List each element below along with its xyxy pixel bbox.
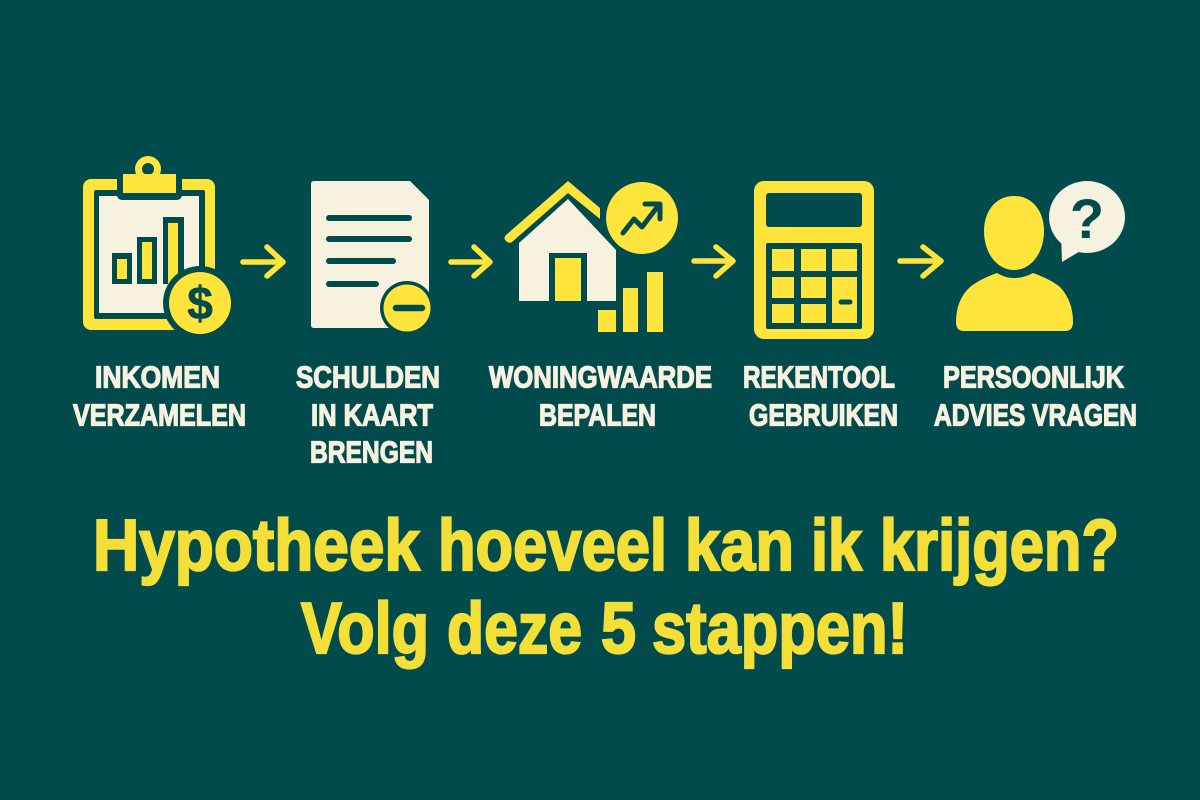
label: woningwaarde bepalen: [489, 360, 712, 432]
label: persoonlijk advies vragen: ADVIES VRAGEN: [934, 398, 1137, 432]
label: inkomen verzamelen: VERZAMELEN: [73, 398, 246, 432]
step 3: house icon with rising-value badge and bars: [504, 178, 682, 332]
label: rekentool gebruiken: [743, 360, 898, 432]
step 5: person icon with question bubble: ?: [1070, 187, 1104, 250]
label: schulden in kaart brengen: [296, 360, 440, 470]
title: Volg: [301, 589, 429, 669]
label: schulden in kaart brengen: SCHULDEN: [296, 360, 440, 394]
label: inkomen verzamelen: INKOMEN: [95, 360, 220, 394]
title: deze: [447, 589, 582, 669]
title: ik: [811, 506, 863, 586]
label: rekentool gebruiken: GEBRUIKEN: [749, 398, 898, 432]
title: hoeveel: [438, 506, 667, 586]
label: rekentool gebruiken: REKENTOOL: [743, 360, 895, 394]
step 1: clipboard icon with bar chart and dollar coin: $: [187, 277, 213, 329]
label: woningwaarde bepalen: BEPALEN: [539, 398, 656, 432]
title: kan: [685, 506, 794, 586]
arrow 3: [694, 247, 733, 276]
step 4: calculator icon: [754, 181, 874, 339]
step 5: person icon with question bubble: [956, 181, 1125, 331]
title: [93, 506, 1119, 669]
title: stappen!: [652, 589, 908, 669]
arrow 1: [243, 247, 283, 276]
label: schulden in kaart brengen: BRENGEN: [310, 434, 433, 470]
arrow 2: [451, 247, 490, 276]
title: 5: [601, 589, 636, 669]
title: Hypotheek: [93, 506, 421, 586]
label: inkomen verzamelen: [73, 360, 246, 432]
label: persoonlijk advies vragen: [934, 360, 1137, 432]
label: persoonlijk advies vragen: PERSOONLIJK: [943, 360, 1124, 394]
step 1: clipboard icon with bar chart and dollar coin: [83, 156, 237, 340]
label: schulden in kaart brengen: IN KAART: [311, 398, 433, 432]
label: woningwaarde bepalen: WONINGWAARDE: [489, 360, 712, 394]
title: krijgen?: [880, 506, 1119, 586]
step 2: document icon with minus badge: [311, 181, 434, 335]
arrow 4: [900, 247, 941, 276]
